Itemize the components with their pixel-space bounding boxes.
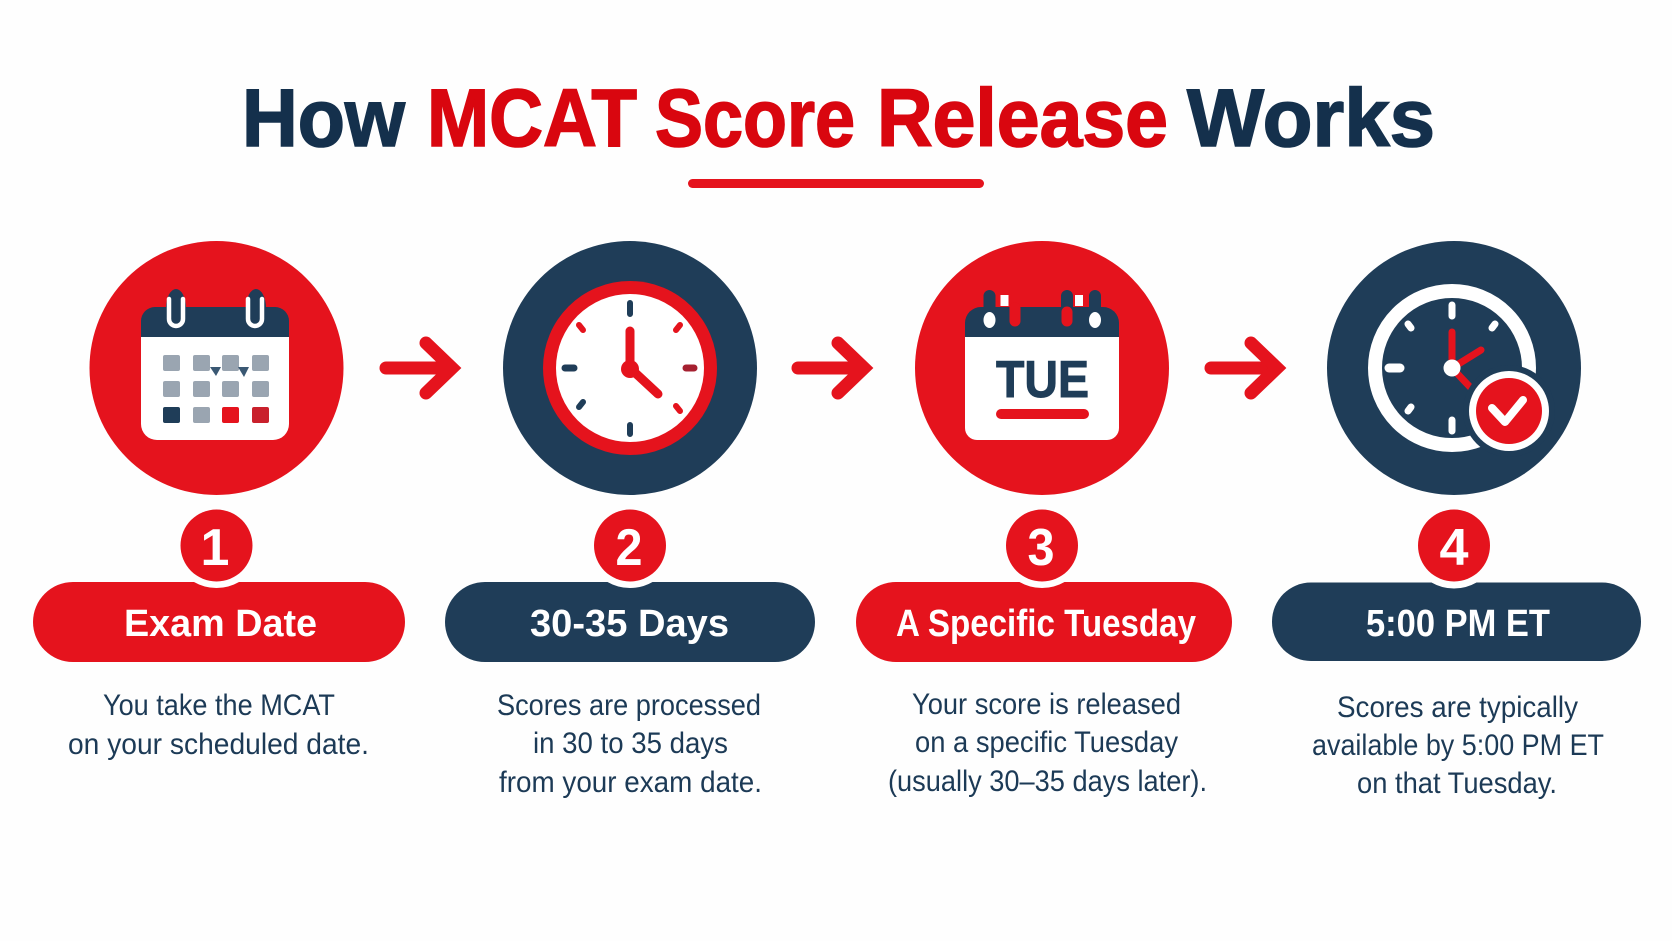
number badge 4 bbox=[1418, 510, 1490, 582]
icon: calendar in red circle bbox=[90, 241, 344, 495]
title: How bbox=[242, 73, 405, 164]
pill: exam date bbox=[33, 582, 405, 662]
pill: 30-35 days: 30-35 Days bbox=[530, 603, 729, 645]
number 4: 4 bbox=[1440, 519, 1469, 577]
pill: 5:00 pm et bbox=[1272, 582, 1641, 661]
description 1: You take the MCAT bbox=[103, 689, 335, 722]
description 3: on a specific Tuesday bbox=[915, 726, 1178, 759]
arrow 2 bbox=[798, 343, 864, 393]
description 1: on your scheduled date. bbox=[68, 728, 369, 761]
description 3: (usually 30–35 days later). bbox=[888, 765, 1207, 798]
number badge 2 bbox=[594, 510, 666, 582]
description 4: Scores are typically bbox=[1337, 691, 1578, 724]
title: Release bbox=[877, 73, 1168, 164]
description 2: from your exam date. bbox=[499, 766, 762, 799]
step 4: 5:00 pm et bbox=[1272, 241, 1641, 800]
pill: a specific tuesday: A Specific Tuesday bbox=[896, 603, 1196, 645]
description 3 bbox=[888, 688, 1207, 798]
number badge 1 bbox=[180, 510, 252, 582]
icon: tuesday calendar in red circle: TUE bbox=[996, 351, 1089, 409]
number 2: 2 bbox=[616, 519, 642, 577]
number 1: 1 bbox=[201, 519, 229, 577]
step 1: exam date bbox=[33, 241, 405, 761]
title: Score bbox=[655, 73, 855, 164]
arrow 1 bbox=[386, 343, 452, 393]
description 4 bbox=[1312, 691, 1604, 800]
step 3: a specific tuesday bbox=[856, 241, 1232, 798]
description 4: on that Tuesday. bbox=[1357, 767, 1557, 800]
title: Works bbox=[1187, 73, 1435, 164]
icon: tuesday calendar in red circle bbox=[915, 241, 1169, 495]
description 3: Your score is released bbox=[912, 688, 1181, 721]
step 2: 30-35 days bbox=[445, 241, 815, 799]
icon: clock in navy circle bbox=[503, 241, 757, 495]
pill: a specific tuesday bbox=[856, 582, 1232, 662]
description 4: available by 5:00 PM ET bbox=[1312, 729, 1604, 762]
arrow 3 bbox=[1211, 343, 1277, 393]
number 3: 3 bbox=[1028, 519, 1054, 577]
pill: 5:00 pm et: 5:00 PM ET bbox=[1366, 603, 1550, 645]
pill: 30-35 days bbox=[445, 582, 815, 662]
title: MCAT bbox=[427, 73, 637, 164]
description 1 bbox=[68, 689, 369, 761]
description 2: in 30 to 35 days bbox=[533, 727, 728, 760]
title bbox=[242, 73, 1435, 164]
pill: exam date: Exam Date bbox=[124, 603, 317, 645]
icon: clock with check badge in navy circle bbox=[1327, 241, 1581, 495]
description 2 bbox=[497, 689, 762, 799]
number badge 3 bbox=[1006, 510, 1078, 582]
title underline bbox=[688, 179, 984, 188]
description 2: Scores are processed bbox=[497, 689, 761, 722]
